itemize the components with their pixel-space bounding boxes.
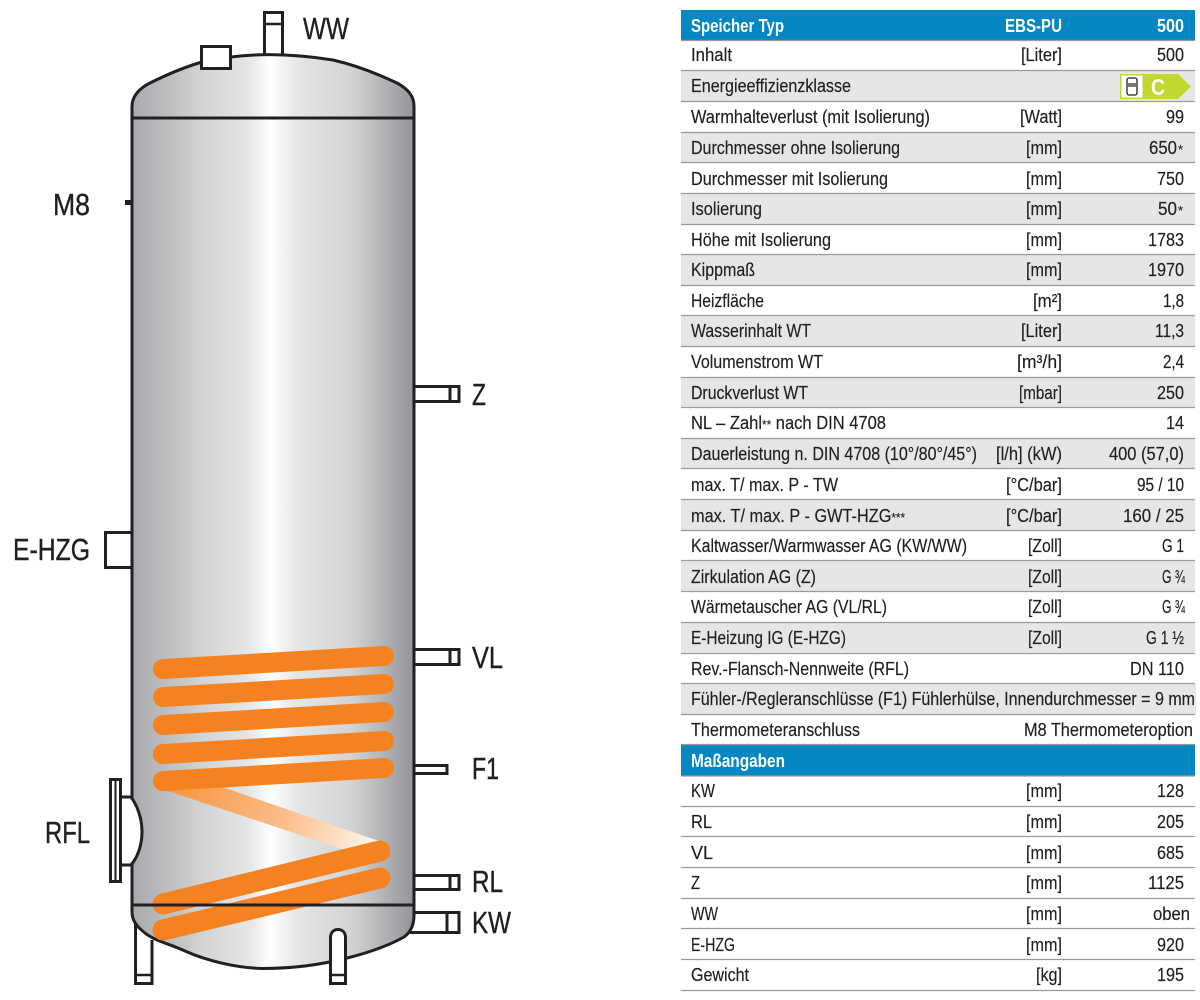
header row: Maßangaben xyxy=(681,745,1195,776)
row: E-HZG: E-HZG xyxy=(691,935,735,955)
row: Warmhalteverlust: Warmhalteverlust (mit Isolierung) xyxy=(691,107,930,127)
row: Warmhalteverlust xyxy=(681,102,1195,132)
row: RL: [mm] xyxy=(1026,812,1062,832)
row: Warmhalteverlust: 99 xyxy=(1166,107,1184,127)
rule: tank top seam xyxy=(132,116,414,120)
label: KW: KW xyxy=(472,906,511,940)
connector: VL xyxy=(413,649,459,665)
row: VL xyxy=(681,837,1195,867)
row: Warmhalteverlust: [Watt] xyxy=(1020,107,1062,127)
row: KW xyxy=(681,776,1195,806)
row: WW xyxy=(681,898,1195,928)
flange: RFL xyxy=(110,780,142,882)
row: E-HZG: 920 xyxy=(1157,935,1184,955)
row: Durchmesser mit Isolierung xyxy=(681,163,1195,193)
row: Durchmesser ohne Isolierung: Durchmesser ohne Isolierung xyxy=(691,138,900,158)
connector: M8 xyxy=(125,200,133,205)
row: Druckverlust WT: 250 xyxy=(1157,383,1184,403)
row: Wärmetauscher: [Zoll] xyxy=(1028,597,1062,617)
row: Wärmetauscher: G ¾ xyxy=(1162,597,1186,617)
row: Isolierung: 50 xyxy=(1158,199,1177,219)
label: E-HZG: E-HZG xyxy=(13,533,90,567)
row: KW: 128 xyxy=(1157,781,1184,801)
row: Energieeffizienzklasse xyxy=(681,71,1195,101)
row: Höhe mit Isolierung: 1783 xyxy=(1148,230,1184,250)
row: Kaltwasser/Warmwasser: Kaltwasser/Warmwasser AG (KW/WW) xyxy=(691,536,967,556)
row: Gewicht: Gewicht xyxy=(691,965,749,985)
connector: left foot xyxy=(136,922,152,984)
row: Zirkulation: Zirkulation AG (Z) xyxy=(691,567,816,587)
row: Druckverlust WT: [mbar] xyxy=(1019,383,1062,403)
row: Thermometeranschluss xyxy=(681,714,1195,744)
row: Volumenstrom WT: 2,4 xyxy=(1163,352,1184,372)
row: Z: [mm] xyxy=(1026,873,1062,893)
row: RL xyxy=(681,806,1195,836)
header row: Speicher Typ: 500 xyxy=(1157,16,1184,36)
row: Z: Z xyxy=(691,873,700,893)
table: specifications xyxy=(681,10,1196,990)
row: Dauerleistung: [l/h] (kW) xyxy=(996,444,1062,464)
row: Zirkulation: [Zoll] xyxy=(1028,567,1062,587)
row: Fühler xyxy=(681,684,1196,714)
icon: energy class C badge: C xyxy=(1151,74,1165,100)
row: Wasserinhalt WT: [Liter] xyxy=(1021,321,1062,341)
row: Kippmaß: [mm] xyxy=(1026,260,1062,280)
row: KW: KW xyxy=(691,781,716,801)
row: Durchmesser mit Isolierung: 750 xyxy=(1157,169,1184,189)
label: WW: WW xyxy=(303,12,349,46)
row: Kaltwasser/Warmwasser: G 1 xyxy=(1162,536,1184,556)
label: Z: Z xyxy=(472,378,486,412)
row: Höhe mit Isolierung: [mm] xyxy=(1026,230,1062,250)
row: Dauerleistung: 400 (57,0) xyxy=(1109,444,1184,464)
connector: Z xyxy=(413,386,459,402)
row: Inhalt: [Liter] xyxy=(1021,45,1062,65)
row: KW: [mm] xyxy=(1026,781,1062,801)
connector: top box xyxy=(202,46,230,68)
row: Wasserinhalt WT xyxy=(681,316,1195,346)
row: Dauerleistung: Dauerleistung n. DIN 4708 (10°/80°/45°) xyxy=(691,444,977,464)
row: NL-Zahl: NL – Zahl** nach DIN 4708 xyxy=(691,413,886,433)
row: Isolierung: Isolierung xyxy=(691,199,762,219)
connector: F1 xyxy=(413,766,447,774)
row: Heizfläche xyxy=(681,286,1195,316)
connector: KW xyxy=(410,912,459,933)
row: Zirkulation xyxy=(681,561,1195,591)
diagram: storage tank xyxy=(13,12,511,984)
connector: WW xyxy=(264,12,283,56)
row: Wärmetauscher xyxy=(681,592,1195,622)
connector: E-HZG xyxy=(106,532,134,568)
heating coil xyxy=(162,656,384,930)
tank body xyxy=(132,55,414,969)
row: Thermometeranschluss: Thermometeranschluss xyxy=(691,720,860,740)
row: Rev.-Flansch xyxy=(681,653,1195,683)
row: NL-Zahl xyxy=(681,408,1195,438)
row: max T/P GWT-HZG: [°C/bar] xyxy=(1006,506,1062,526)
row: E-HZG xyxy=(681,929,1195,959)
row: Druckverlust WT xyxy=(681,377,1195,407)
row: max T/P GWT-HZG: max. T/ max. P - GWT-HZG*** xyxy=(691,506,905,526)
row: Wasserinhalt WT: Wasserinhalt WT xyxy=(691,321,811,341)
row: Wasserinhalt WT: 11,3 xyxy=(1155,321,1184,341)
connector: right foot xyxy=(330,930,346,984)
label: M8: M8 xyxy=(53,188,90,222)
row: max T/P GWT-HZG: 160 / 25 xyxy=(1123,506,1184,526)
row: Isolierung: * xyxy=(1178,203,1183,218)
row: max T/P GWT-HZG xyxy=(681,500,1195,530)
row: Inhalt: 500 xyxy=(1157,45,1184,65)
row: Höhe mit Isolierung: Höhe mit Isolierung xyxy=(691,230,831,250)
row: Energieeffizienzklasse: Energieeffizienzklasse xyxy=(691,76,851,96)
row: Kippmaß xyxy=(681,255,1195,285)
row: Rev.-Flansch: DN 110 xyxy=(1130,659,1184,679)
row: Gewicht xyxy=(681,960,1195,990)
row: RL: RL xyxy=(691,812,712,832)
row: E-HZG: [mm] xyxy=(1026,935,1062,955)
row: Durchmesser mit Isolierung: [mm] xyxy=(1026,169,1062,189)
row: Volumenstrom WT: [m³/h] xyxy=(1017,352,1062,372)
row: Heizfläche: 1,8 xyxy=(1163,291,1184,311)
row: Durchmesser mit Isolierung: Durchmesser mit Isolierung xyxy=(691,169,888,189)
row: Heizfläche: [m²] xyxy=(1033,291,1062,311)
row: WW: WW xyxy=(691,904,719,924)
header row: Speicher Typ xyxy=(681,10,1195,40)
row: Inhalt: Inhalt xyxy=(691,45,732,65)
header row: Speicher Typ: Speicher Typ xyxy=(691,16,784,36)
row: Inhalt xyxy=(681,40,1195,70)
row: Isolierung xyxy=(681,194,1195,224)
row: Höhe mit Isolierung xyxy=(681,224,1195,254)
row: Kaltwasser/Warmwasser: [Zoll] xyxy=(1028,536,1062,556)
label: RFL: RFL xyxy=(45,816,90,850)
row: Gewicht: 195 xyxy=(1157,965,1184,985)
row: NL-Zahl: 14 xyxy=(1166,413,1184,433)
row: Heizfläche: Heizfläche xyxy=(691,291,764,311)
row: Kippmaß: Kippmaß xyxy=(691,260,755,280)
icon: energy class C badge xyxy=(1120,74,1191,100)
row: Durchmesser ohne Isolierung: [mm] xyxy=(1026,138,1062,158)
row: Gewicht: [kg] xyxy=(1036,965,1062,985)
row: E-Heizung: E-Heizung IG (E-HZG) xyxy=(691,628,846,648)
row: max T/P TW: max. T/ max. P - TW xyxy=(691,475,839,495)
row: Durchmesser ohne Isolierung xyxy=(681,132,1195,162)
rule: tank bottom seam xyxy=(131,904,414,906)
label: VL: VL xyxy=(472,641,503,675)
row: WW: [mm] xyxy=(1026,904,1062,924)
row: Z xyxy=(681,868,1195,898)
row: Rev.-Flansch: Rev.-Flansch-Nennweite (RFL) xyxy=(691,659,909,679)
row: Zirkulation: G ¾ xyxy=(1162,567,1186,587)
row: Druckverlust WT: Druckverlust WT xyxy=(691,383,808,403)
label: F1: F1 xyxy=(472,752,499,786)
row: E-Heizung xyxy=(681,622,1195,652)
header row: Speicher Typ: EBS-PU xyxy=(1005,16,1062,36)
row: Kaltwasser/Warmwasser xyxy=(681,530,1195,560)
row: Volumenstrom WT: Volumenstrom WT xyxy=(691,352,823,372)
row: VL: VL xyxy=(691,843,713,863)
row: max T/P TW: [°C/bar] xyxy=(1006,475,1062,495)
row: Volumenstrom WT xyxy=(681,346,1195,376)
row: Wärmetauscher: Wärmetauscher AG (VL/RL) xyxy=(691,597,887,617)
row: E-Heizung: [Zoll] xyxy=(1028,628,1062,648)
row: VL: 685 xyxy=(1157,843,1184,863)
row: Dauerleistung xyxy=(681,438,1195,468)
label: RL: RL xyxy=(472,865,503,899)
row: Kippmaß: 1970 xyxy=(1148,260,1184,280)
row: E-Heizung: G 1 ½ xyxy=(1146,628,1184,648)
row: WW: oben xyxy=(1153,904,1190,924)
row: Z: 1125 xyxy=(1148,873,1184,893)
row: Durchmesser ohne Isolierung: 650 xyxy=(1149,138,1177,158)
row: Durchmesser ohne Isolierung: * xyxy=(1178,142,1183,157)
row: max T/P TW: 95 / 10 xyxy=(1137,475,1184,495)
header row: Maßangaben: Maßangaben xyxy=(691,751,785,771)
connector: RL xyxy=(413,875,459,890)
row: Isolierung: [mm] xyxy=(1026,199,1062,219)
row: max T/P TW xyxy=(681,469,1195,499)
row: VL: [mm] xyxy=(1026,843,1062,863)
row: RL: 205 xyxy=(1157,812,1184,832)
